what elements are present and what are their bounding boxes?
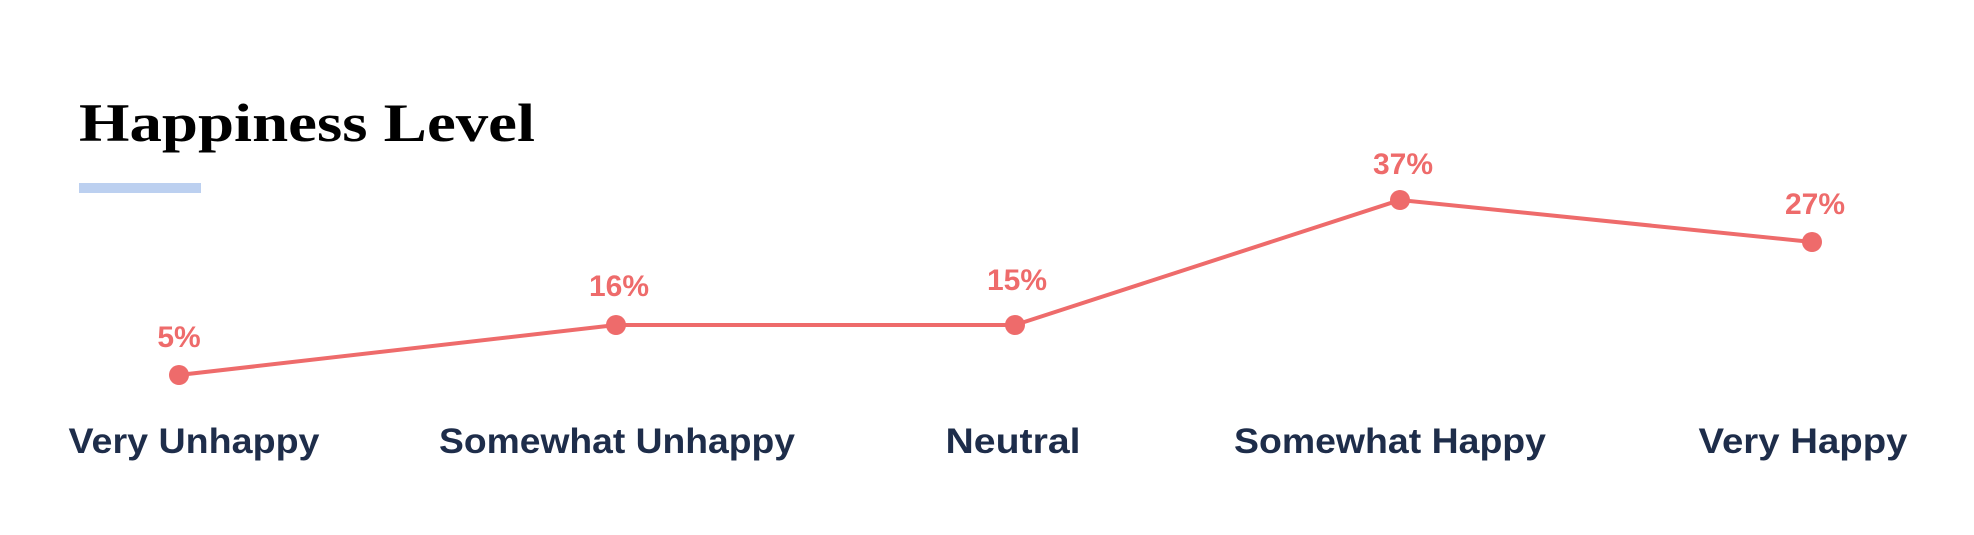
line chart <box>169 190 1822 385</box>
category labels: Somewhat Happy <box>1234 422 1547 461</box>
value labels: 15% <box>987 264 1047 297</box>
category labels: Very Unhappy <box>68 422 320 461</box>
data point: somewhat unhappy <box>606 315 626 335</box>
title: Happiness Level <box>79 93 535 153</box>
value labels: 37% <box>1373 148 1433 181</box>
data point: very unhappy <box>169 365 189 385</box>
data point: neutral <box>1005 315 1025 335</box>
value labels: 16% <box>589 270 649 303</box>
category labels: Somewhat Unhappy <box>439 422 796 461</box>
category labels: Very Happy <box>1698 422 1908 461</box>
data point: somewhat happy <box>1390 190 1410 210</box>
value labels <box>157 148 1845 354</box>
category labels <box>68 422 1908 461</box>
category labels: Neutral <box>946 422 1080 461</box>
data point: very happy <box>1802 232 1822 252</box>
value labels: 5% <box>157 321 201 354</box>
title underline accent <box>79 183 201 193</box>
value labels: 27% <box>1785 188 1845 221</box>
